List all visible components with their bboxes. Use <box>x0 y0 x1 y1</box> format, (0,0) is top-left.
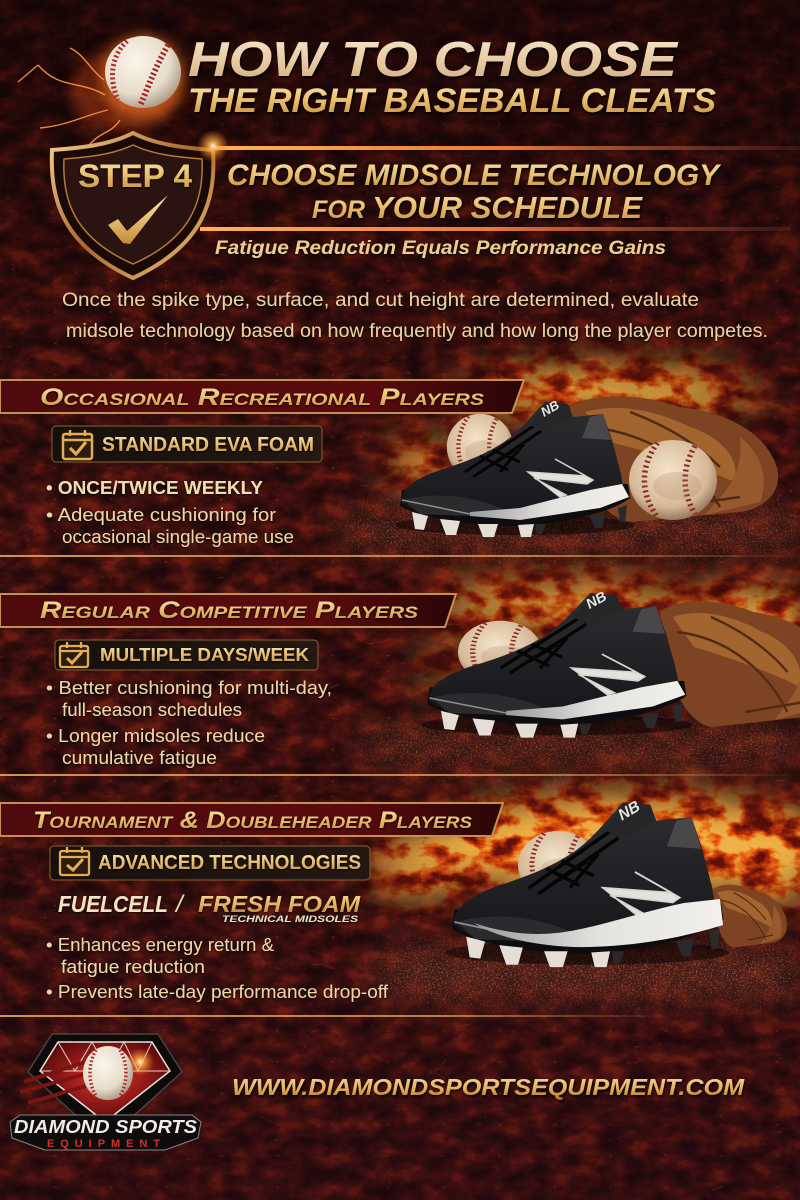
intro text: Once the spike type, surface, and cut height are determined, evaluate <box>62 290 699 311</box>
midsole brand names: FUELCELL <box>58 891 168 917</box>
midsole brand names <box>58 891 361 925</box>
section heading band: Occasional Recreational Players <box>40 384 485 411</box>
intro text: midsole technology based on how frequently and how long the player competes. <box>66 321 768 342</box>
logo: diamond sports equipment: EQUIPMENT <box>47 1138 160 1150</box>
step heading: CHOOSE MIDSOLE TECHNOLOGY <box>227 159 722 192</box>
bullet list: • Prevents late-day performance drop-off <box>46 982 389 1002</box>
logo: diamond sports equipment <box>10 1034 201 1150</box>
section heading band: Regular Competitive Players <box>40 597 419 624</box>
image: cleat with baseballs and glove, section 1 <box>395 396 778 537</box>
divider 1 <box>0 555 800 557</box>
bullet list: fatigue reduction <box>61 957 205 977</box>
shield badge: step 4: STEP 4 <box>78 158 192 194</box>
panel: regular competitive players <box>0 594 456 768</box>
bullet list <box>46 478 294 547</box>
bullet list <box>46 935 389 1002</box>
bullet list <box>46 678 332 768</box>
bullet list: • ONCE/TWICE WEEKLY <box>46 478 263 498</box>
step heading: FOR YOUR SCHEDULE <box>312 190 643 225</box>
title <box>188 33 716 120</box>
image: cleat with baseball and glove, section 2 <box>422 589 800 738</box>
badge: standard eva foam: STANDARD EVA FOAM <box>102 434 314 456</box>
subheading: Fatigue Reduction Equals Performance Gains <box>215 238 666 259</box>
intro text <box>62 290 768 342</box>
panel: occasional recreational players <box>0 380 524 547</box>
bullet list: • Better cushioning for multi-day, <box>46 678 332 698</box>
divider 3 <box>0 1015 670 1017</box>
title: THE RIGHT BASEBALL CLEATS <box>188 82 716 120</box>
icon: calendar check <box>63 430 92 459</box>
icon: flaming baseball <box>18 34 185 150</box>
bullet list: • Longer midsoles reduce <box>46 726 265 746</box>
icon: calendar check <box>60 847 89 875</box>
section heading band <box>0 380 524 413</box>
badge: advanced technologies <box>50 846 370 880</box>
divider 2 <box>0 774 800 776</box>
section heading band: Tournament & Doubleheader Players <box>33 807 473 834</box>
midsole brand names: TECHNICAL MIDSOLES <box>222 914 359 925</box>
step heading rules <box>200 146 800 231</box>
website url: WWW.DIAMONDSPORTSEQUIPMENT.COM <box>232 1074 745 1100</box>
bullet list: occasional single-game use <box>62 527 294 547</box>
section heading band <box>0 803 503 836</box>
bullet list: full-season schedules <box>62 700 242 720</box>
title: HOW TO CHOOSE <box>188 33 678 87</box>
icon: gold check mark <box>108 195 168 244</box>
badge: multiple days/week: MULTIPLE DAYS/WEEK <box>100 645 309 665</box>
icon: calendar check <box>60 642 88 667</box>
panel: tournament and doubleheader players <box>0 803 503 1002</box>
bullet list: • Enhances energy return & <box>46 935 274 955</box>
step heading <box>227 159 722 225</box>
bullet list: cumulative fatigue <box>62 748 217 768</box>
midsole brand names: / <box>174 891 185 918</box>
shield badge: step 4 <box>52 130 229 278</box>
image: cleat with baseball and glove, section 3 <box>446 798 787 967</box>
midsole brand names: FRESH FOAM <box>198 891 361 917</box>
badge: standard eva foam <box>52 426 322 462</box>
bullet list: • Adequate cushioning for <box>46 505 276 525</box>
section heading band <box>0 594 456 627</box>
logo: diamond sports equipment: DIAMOND SPORTS <box>14 1117 197 1137</box>
badge: multiple days/week <box>55 640 318 670</box>
badge: advanced technologies: ADVANCED TECHNOLOGIES <box>98 852 361 874</box>
